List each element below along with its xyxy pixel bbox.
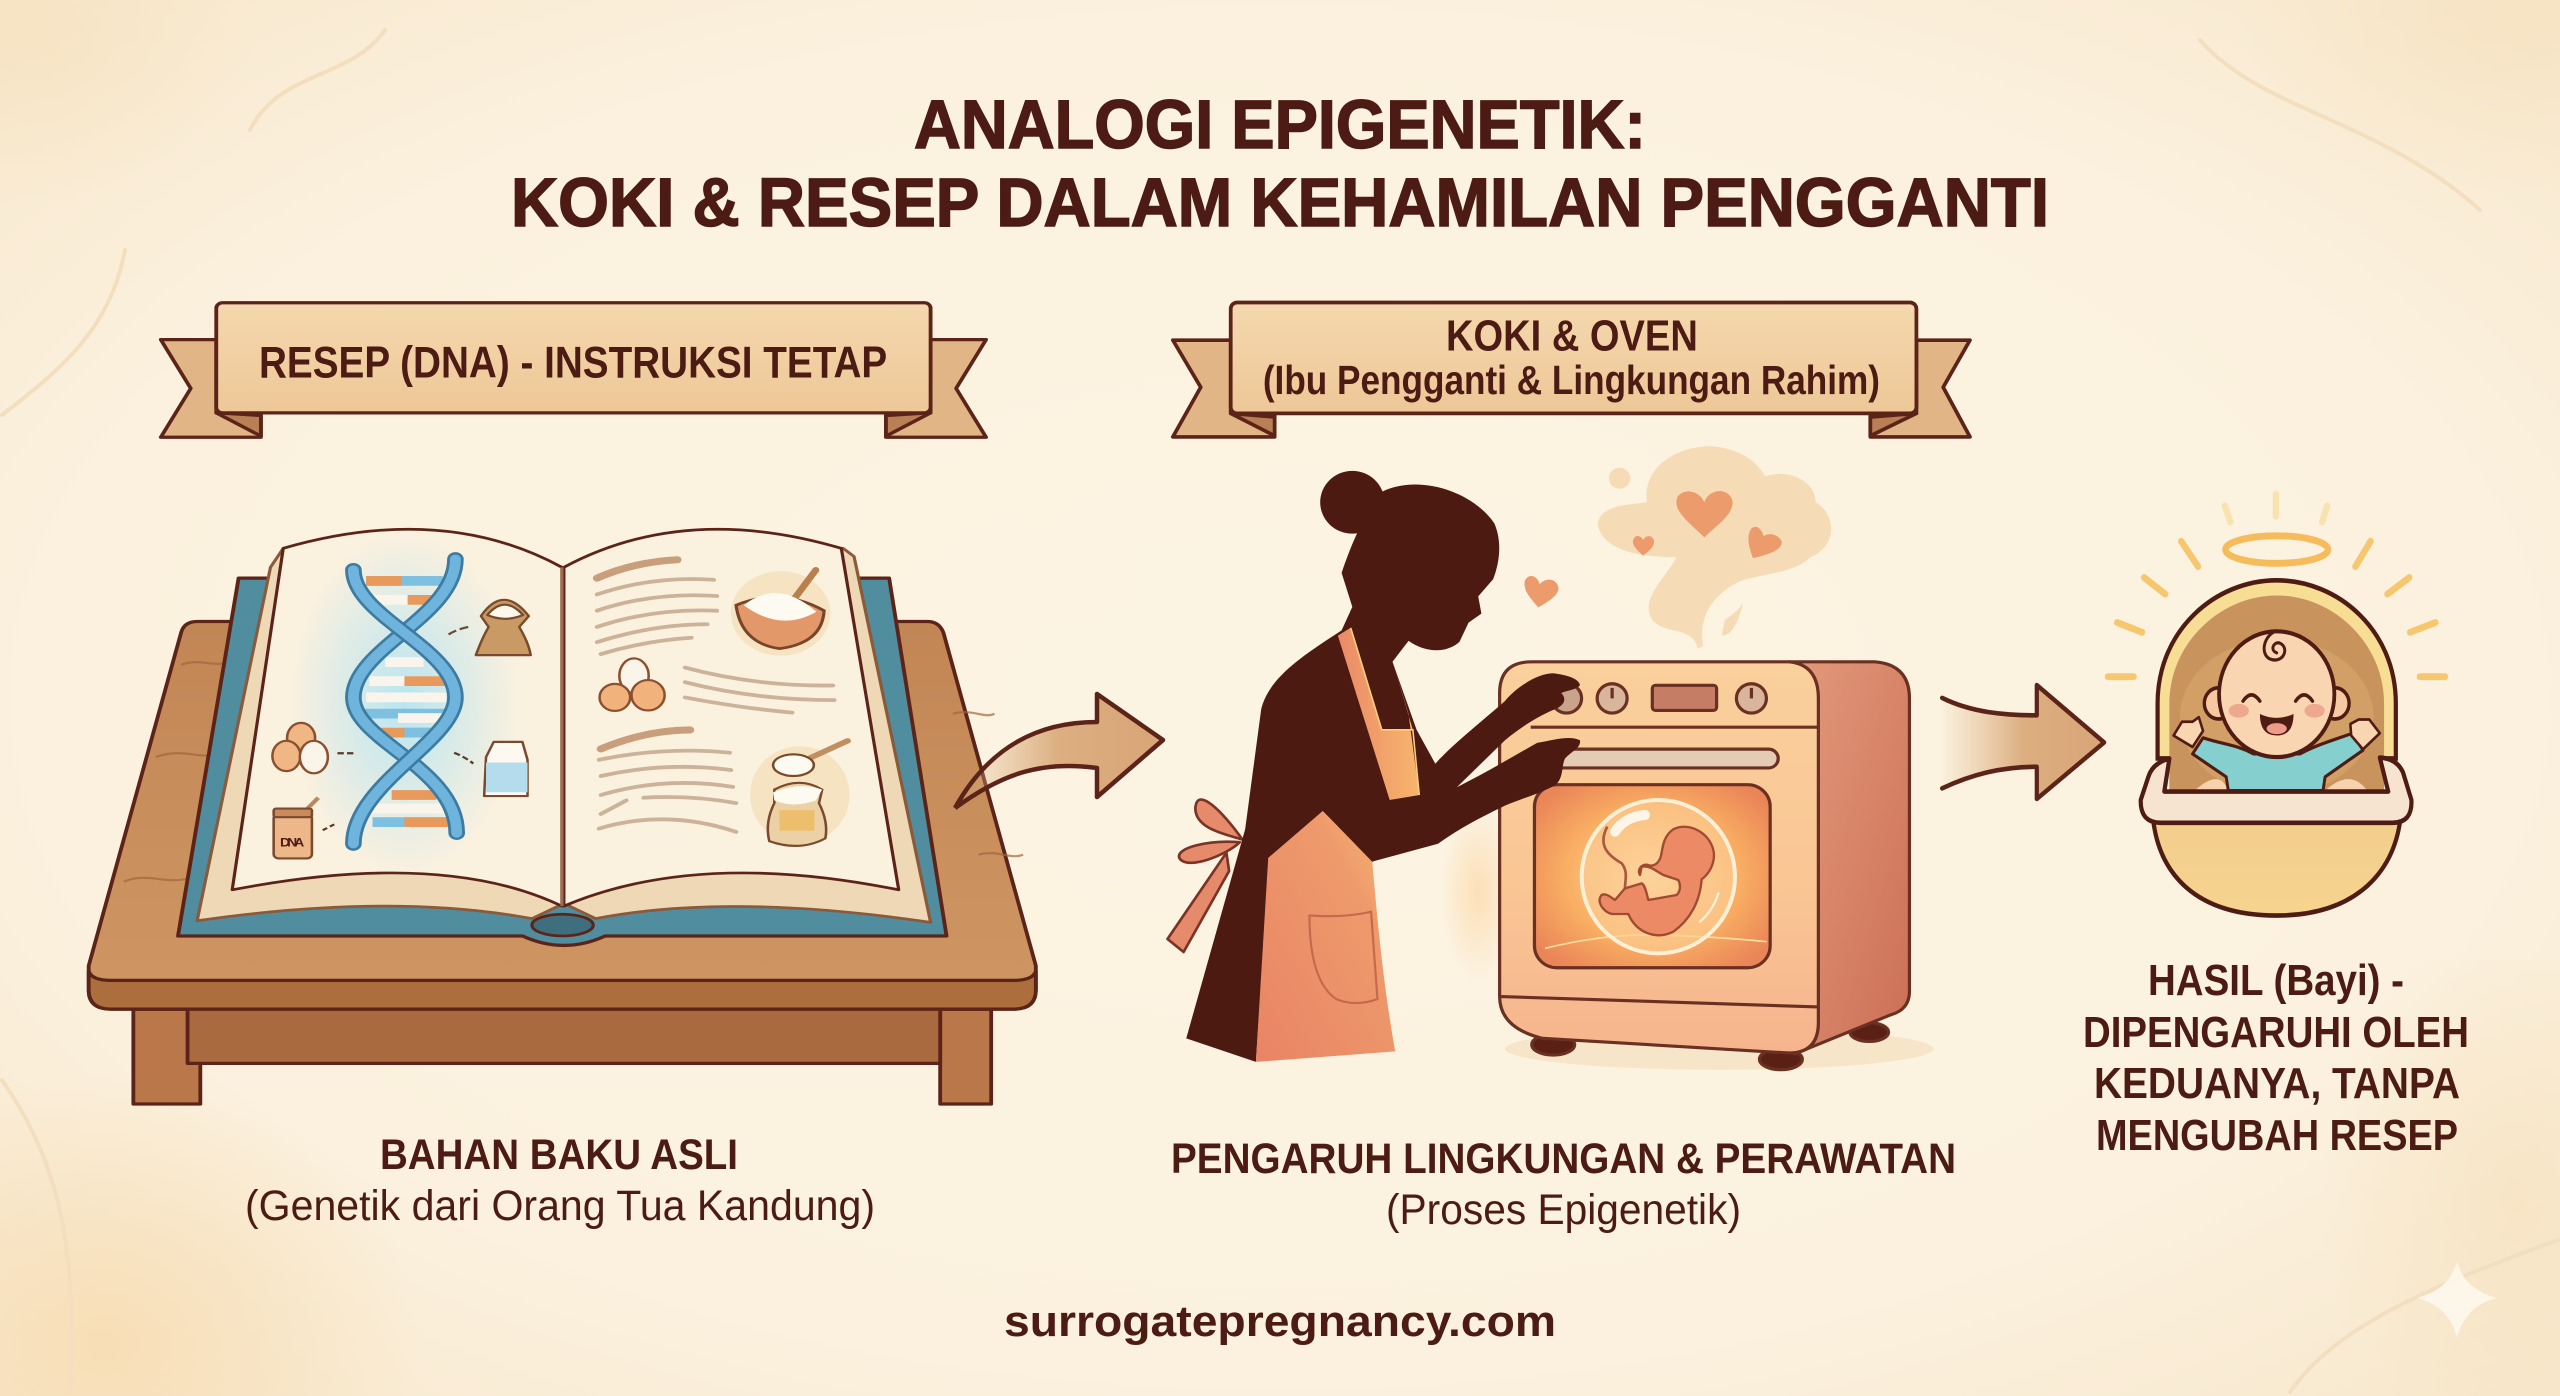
- sparkle: [2417, 1262, 2497, 1338]
- icon: dna jar: [274, 798, 336, 858]
- panel: recipe book on table: [89, 303, 1036, 1104]
- banner: koki: KOKI & OVEN: [1446, 312, 1698, 360]
- oven window: [1534, 785, 1770, 968]
- caption: hasil: KEDUANYA, TANPA: [2094, 1059, 2460, 1108]
- oven controls: [1552, 684, 1766, 713]
- caption: hasil: DIPENGARUHI OLEH: [2083, 1008, 2469, 1057]
- hood: [2158, 580, 2396, 758]
- banner: koki: [1173, 302, 1970, 437]
- banner: resep: [161, 303, 986, 437]
- caption: bahan baku: BAHAN BAKU ASLI: [380, 1131, 738, 1179]
- banner: koki: (Ibu Pengganti & Lingkungan Rahim): [1263, 357, 1880, 403]
- table: [89, 622, 1036, 1104]
- body and arms: [2195, 779, 2228, 791]
- apron skirt: [1256, 811, 1395, 1062]
- caption: pengaruh: [1171, 1135, 1956, 1234]
- caption: pengaruh: PENGARUH LINGKUNGAN & PERAWATAN: [1171, 1135, 1956, 1183]
- recipe text lines: [597, 560, 834, 832]
- caption: hasil: MENGUBAH RESEP: [2096, 1111, 2458, 1160]
- basket: [2153, 814, 2401, 916]
- icon: baby in bassinet: [2108, 494, 2445, 916]
- woman apron ties: [1167, 800, 1242, 952]
- book page edges: [197, 548, 931, 922]
- oven handle: [1553, 749, 1778, 768]
- title: ANALOGI EPIGENETIK:: [914, 86, 1646, 163]
- icon: milk carton: [454, 742, 528, 796]
- halo and rays: [2108, 494, 2445, 677]
- steam cloud with hearts: [1524, 446, 1831, 649]
- caption: hasil: [2083, 956, 2469, 1160]
- icon: flour sack: [448, 600, 531, 655]
- baby head: [2204, 688, 2233, 719]
- caption: bahan baku: (Genetik dari Orang Tua Kandung): [245, 1182, 875, 1230]
- icon: eggs right: [600, 658, 665, 711]
- icon: dna jar: DNA: [280, 836, 305, 849]
- book cover: [178, 578, 947, 945]
- icon: spoon and sack: [750, 741, 850, 846]
- book pages: [232, 529, 899, 906]
- caption: hasil: HASIL (Bayi) -: [2148, 956, 2404, 1005]
- title: [511, 86, 2049, 241]
- caption: bahan baku: [245, 1131, 875, 1230]
- panel: chef and oven: [1167, 302, 1970, 1070]
- caption: pengaruh: (Proses Epigenetik): [1386, 1186, 1741, 1234]
- arrow: oven to baby: [1942, 685, 2104, 799]
- woman silhouette: [1186, 471, 1580, 1062]
- DNA helix: [290, 529, 519, 876]
- apron bib: [1309, 628, 1419, 1003]
- woman front arm: [1291, 677, 1580, 862]
- arrow: book to oven: [955, 694, 1163, 808]
- oven: [1441, 662, 1934, 1070]
- icon: bowl of flour: [731, 570, 830, 656]
- title: KOKI & RESEP DALAM KEHAMILAN PENGGANTI: [511, 164, 2049, 241]
- bubble with fetus: [1545, 800, 1767, 953]
- banner: resep: RESEP (DNA) - INSTRUKSI TETAP: [259, 338, 887, 388]
- icon: eggs left: [272, 723, 355, 773]
- footer url: surrogatepregnancy.com: [1004, 1297, 1556, 1346]
